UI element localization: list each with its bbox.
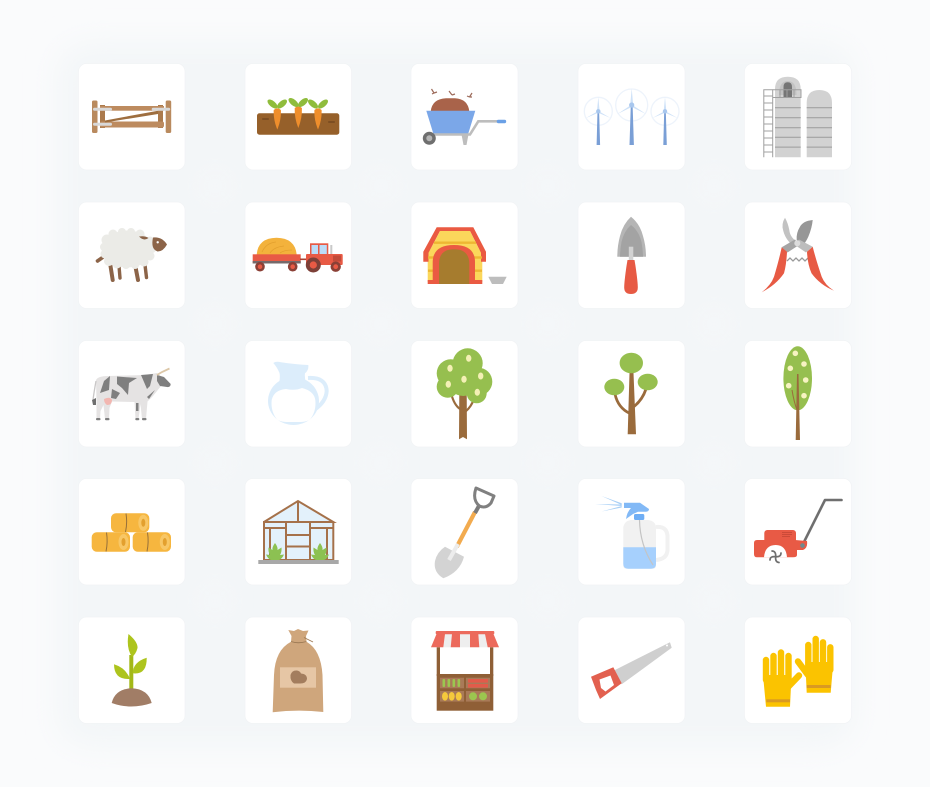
icon: sapling in soil: [112, 634, 152, 706]
panel: dog house: [411, 202, 518, 308]
panel: pruning shears: [744, 202, 852, 308]
icon: sheep: [98, 228, 167, 280]
panel: lawn mower: [744, 478, 852, 585]
panel: wind turbines: [578, 64, 685, 170]
panel: silos: [744, 64, 852, 170]
panel: greenhouse: [245, 478, 352, 585]
panel: spray bottle: [578, 478, 685, 585]
panel: market stall: [411, 617, 518, 724]
panel: sapling: [78, 617, 185, 724]
panel: gloves: [744, 617, 852, 724]
icon: work gloves: [763, 639, 833, 707]
panel: hay bales: [78, 478, 185, 585]
panel: fence gate: [78, 64, 185, 170]
panel: trowel: [578, 202, 685, 308]
panel: shovel: [411, 478, 518, 585]
icon: spray bottle: [595, 496, 668, 569]
icon: silos with ladder: [764, 77, 832, 157]
panel: seed sack: [245, 617, 352, 724]
panel: three-branch tree: [578, 340, 685, 447]
icon: market stall: [431, 631, 499, 711]
icon: wheelbarrow: [423, 89, 506, 145]
icon: fence gate: [92, 100, 171, 133]
icon: dog house and bowl: [423, 227, 507, 284]
icon: hand saw: [591, 642, 672, 699]
icon: shovel: [435, 488, 494, 578]
panel: carrot bed: [245, 64, 352, 170]
panel: fruit tree: [411, 340, 518, 447]
panel: sheep: [78, 202, 185, 308]
icon: burlap sack: [273, 629, 323, 712]
panel: cow: [78, 340, 185, 447]
panel: tractor with hay: [245, 202, 352, 308]
icon: poplar tree with blossoms: [783, 346, 812, 440]
icon: trowel: [617, 217, 646, 294]
icon: carrots in soil: [257, 96, 339, 135]
panel: tall tree: [744, 340, 852, 447]
icon: greenhouse: [258, 501, 339, 564]
icon: tractor and hay trailer: [253, 238, 343, 272]
icon: wind turbines: [584, 88, 679, 145]
icon: milk jug: [268, 362, 327, 425]
icon: lawn mower: [754, 500, 842, 562]
panel: wheelbarrow: [411, 64, 518, 170]
panel: hand saw: [578, 617, 685, 724]
icon: round-crown tree: [604, 353, 658, 434]
panel: milk jug: [245, 340, 352, 447]
icon: pruning shears: [762, 218, 834, 292]
icon: dairy cow: [92, 368, 171, 420]
icon: hay bales: [92, 513, 171, 552]
icon: fruit tree: [437, 348, 492, 439]
